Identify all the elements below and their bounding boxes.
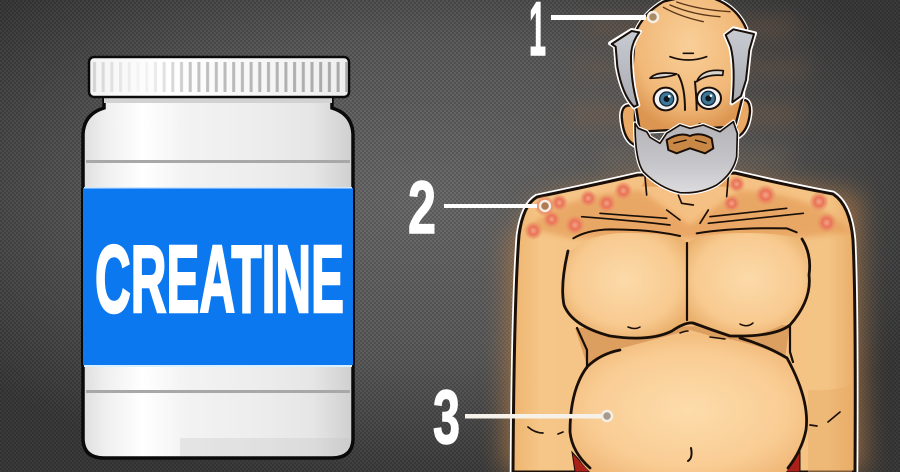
bottle body: [83, 97, 353, 458]
glow: orange haze around figure: [502, 20, 866, 472]
eye right: [697, 88, 721, 109]
chest lines: [528, 239, 840, 461]
marker 2: [540, 201, 550, 211]
rib shadow: [575, 325, 790, 368]
number 3: 3: [433, 375, 460, 460]
right ear: [737, 100, 750, 137]
bottle lower groove: [86, 390, 350, 393]
beard: [635, 122, 737, 193]
eyebrows: [650, 70, 723, 82]
bottle: creatine jar: [82, 57, 354, 458]
belly: [570, 334, 807, 472]
right pectoral: [687, 233, 809, 336]
marker 3: [602, 411, 612, 421]
bottle cap: [89, 57, 349, 97]
marker 1: [648, 12, 658, 22]
arm shading: [808, 385, 852, 472]
leader line 2: [444, 204, 537, 208]
bottle upper groove: [86, 160, 350, 163]
left ear: [622, 105, 635, 145]
number 2: 2: [408, 166, 436, 249]
left pectoral: [564, 233, 687, 337]
mouth: [667, 134, 713, 153]
bottle base shade: [180, 438, 351, 456]
label text: CREATINE: [95, 226, 344, 333]
bottle neck shadow: [104, 98, 332, 103]
callout 1: hair: [529, 0, 658, 72]
figure: man with symptoms: [513, 0, 855, 472]
callout 2: skin: [408, 166, 550, 249]
callout 3: belly: [433, 375, 612, 460]
upper chest shading: [528, 190, 850, 238]
red shorts: [572, 452, 800, 472]
head, neck and rash drawn in zoom coordinates: [524, 0, 837, 240]
head and bald scalp: [632, 0, 746, 132]
torso and arms: [513, 173, 855, 472]
eye left: [654, 88, 678, 110]
blue label: [82, 187, 354, 367]
neck and collar: [573, 177, 803, 238]
hair strands and forehead wrinkle: [663, 2, 730, 60]
hair right: [725, 28, 755, 103]
leader line 1: [551, 15, 646, 20]
navel: [688, 448, 692, 461]
face lines: [678, 75, 700, 128]
leader line 3: [465, 414, 601, 418]
rash spots: [524, 175, 837, 240]
hair left: [610, 30, 640, 107]
